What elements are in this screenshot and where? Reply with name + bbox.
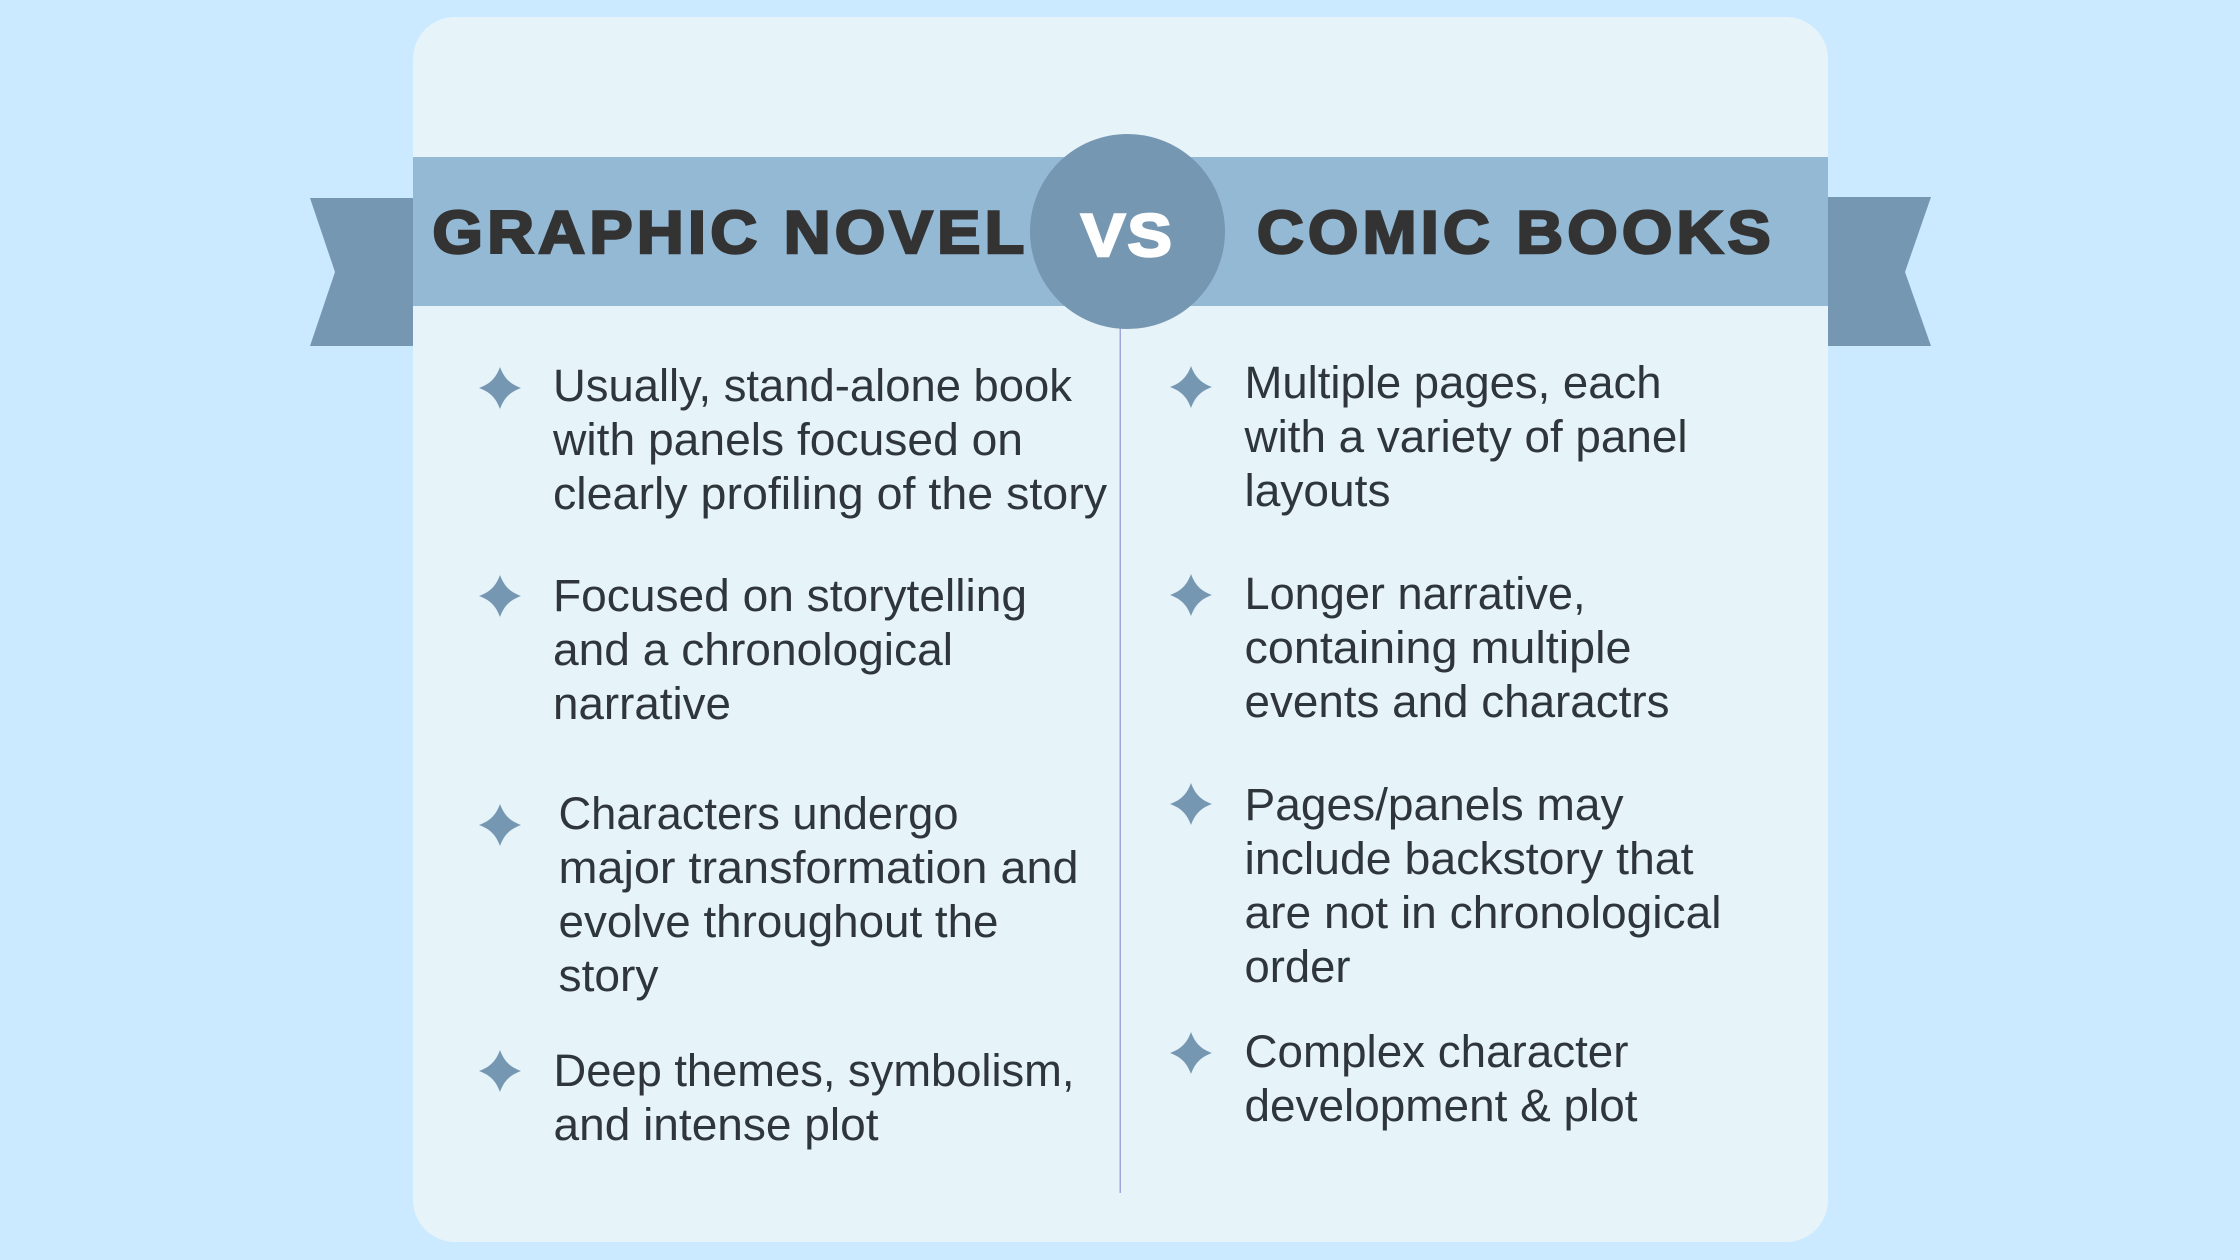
text: characters: Characters undergo	[558, 788, 958, 839]
text: themes	[554, 1045, 1074, 1150]
icon: star 3	[479, 804, 521, 846]
text: complex character: development & plot	[1244, 1080, 1638, 1131]
text: characters: major transformation and	[558, 842, 1078, 893]
heading: vs: VS	[1081, 202, 1174, 269]
text: characters: story	[558, 950, 659, 1001]
text: backstory: are not in chronological	[1244, 887, 1722, 938]
ribbon tail: left	[310, 198, 413, 346]
text: multiple pages: layouts	[1244, 465, 1390, 516]
text: longer narrative: Longer narrative,	[1244, 568, 1586, 619]
text: storytelling	[553, 570, 1027, 729]
heading: graphic novel: GRAPHIC NOVEL	[432, 199, 1028, 266]
center divider line	[1120, 325, 1121, 1193]
icon: star 6	[1170, 574, 1212, 616]
ribbon tail: right	[1828, 197, 1931, 346]
text: storytelling: and a chronological	[553, 624, 953, 675]
text: multiple pages	[1243, 357, 1688, 516]
icon: star 8	[1170, 1032, 1212, 1074]
icon: star 1	[479, 367, 521, 409]
text: longer narrative: events and charactrs	[1244, 676, 1670, 727]
text: backstory	[1244, 779, 1722, 992]
text: longer narrative: containing multiple	[1244, 622, 1632, 673]
text: multiple pages: with a variety of panel	[1243, 411, 1688, 462]
text: stand-alone book	[552, 360, 1108, 519]
text: storytelling: narrative	[553, 678, 731, 729]
text: themes: Deep themes, symbolism,	[554, 1045, 1074, 1096]
text: complex character	[1244, 1026, 1638, 1131]
text: characters: evolve throughout the	[558, 896, 998, 947]
text: longer narrative	[1244, 568, 1670, 727]
text: backstory: include backstory that	[1244, 833, 1694, 884]
header band	[413, 157, 1828, 306]
icon: star 4	[479, 1050, 521, 1092]
icon: star 7	[1170, 783, 1212, 825]
text: backstory: Pages/panels may	[1244, 779, 1624, 830]
text: complex character: Complex character	[1244, 1026, 1629, 1077]
left column	[479, 360, 1108, 1150]
text: themes: and intense plot	[554, 1099, 879, 1150]
text: backstory: order	[1244, 941, 1351, 992]
text: multiple pages: Multiple pages, each	[1244, 357, 1662, 408]
text: stand-alone book: with panels focused on	[552, 414, 1023, 465]
heading: comic books: COMIC BOOKS	[1257, 199, 1775, 266]
panel: comparison card	[413, 17, 1828, 1242]
text: storytelling: Focused on storytelling	[553, 570, 1027, 621]
vs badge circle	[1030, 134, 1225, 329]
text: stand-alone book: clearly profiling of the story	[553, 468, 1108, 519]
text: characters	[558, 788, 1078, 1001]
icon: star 2	[479, 575, 521, 617]
icon: star 5	[1170, 366, 1212, 408]
right column	[1170, 357, 1722, 1131]
text: stand-alone book: Usually, stand-alone book	[553, 360, 1073, 411]
